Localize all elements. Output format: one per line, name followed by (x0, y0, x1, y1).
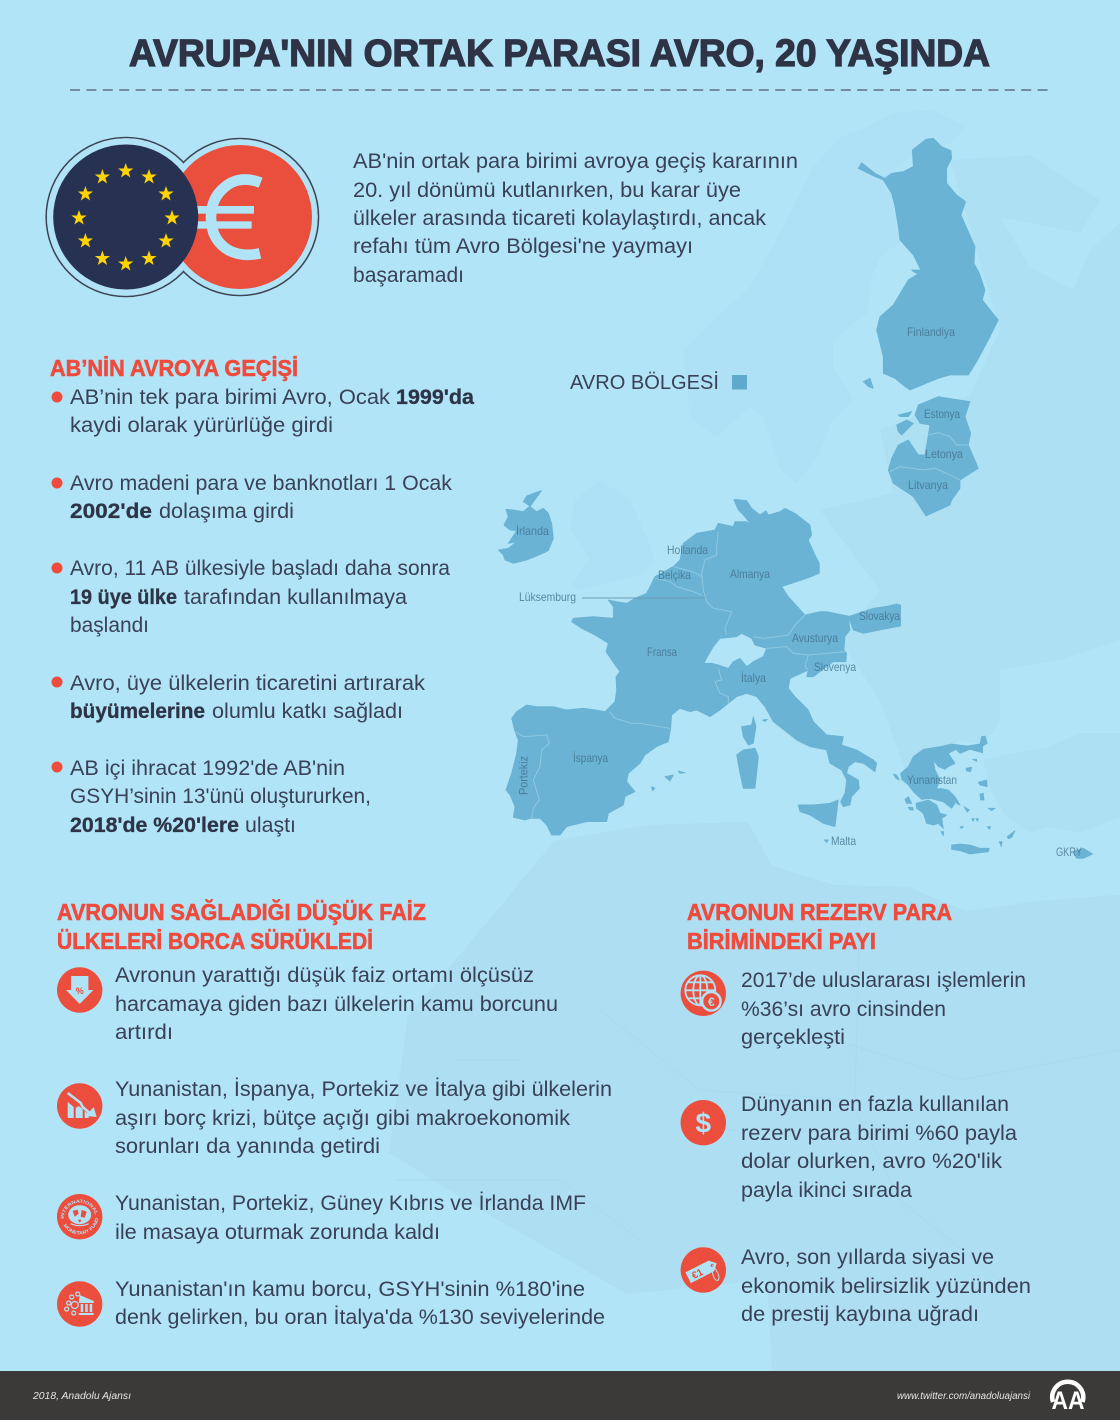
Scandinavia (683, 110, 967, 483)
text: low interest spending: harcamaya giden bazı ülkelerin kamu borcunu (115, 993, 558, 1016)
bullet list: transition to the euro: büyümelerine (70, 700, 205, 723)
icon: euro price tag (681, 1247, 726, 1293)
map: country labels: İspanya (573, 751, 608, 765)
map: country labels: Estonya (924, 407, 960, 421)
text: IMF table: Yunanistan, Portekiz, Güney Kıbrıs ve İrlanda IMF (115, 1192, 586, 1215)
bullet list: transition to the euro: Avro, 11 AB ülkesiyle başladı daha sonra (70, 557, 450, 580)
text: international transactions (741, 969, 1026, 1049)
text: reserve currency (741, 1093, 1017, 1202)
text: prestige loss: de prestij kaybına uğradı (741, 1303, 979, 1326)
map: country labels: Slovenya (814, 660, 856, 674)
intro text: AB'nin ortak para birimi avroya geçiş kararının (353, 150, 798, 173)
icon: IMF seal: MONETARY FUND (64, 1218, 98, 1234)
text: reserve currency: payla ikinci sırada (741, 1179, 912, 1202)
bullet list: transition to the euro: başlandı (70, 614, 149, 637)
footer (0, 1371, 1120, 1420)
map: country labels: Lüksemburg (519, 590, 576, 604)
bullet list: transition to the euro: 2018'de %20'lere (70, 814, 239, 837)
map: country labels: Finlandiya (907, 325, 955, 339)
bullet list: transition to the euro: olumlu katkı sağladı (212, 700, 403, 723)
legend: euro area: AVRO BÖLGESİ (570, 371, 719, 394)
Eastern Europe and Russia (820, 155, 1120, 770)
Africa: faint borders (395, 900, 1120, 1280)
heading: reserve currency share (687, 899, 952, 954)
icon: interest rate down: % (76, 986, 84, 996)
heading: low interest debt (57, 898, 426, 954)
map: country labels: Portekiz (516, 756, 530, 795)
map: country labels: Belçika (658, 568, 691, 582)
icon: globe with euro: € (708, 995, 715, 1009)
UK (570, 480, 655, 590)
Africa (389, 822, 1120, 1371)
text: public debt: denk gelirken, bu oran İtalya'da %130 seviyelerinde (115, 1306, 605, 1329)
bullet list: transition to the euro: 2002'de (70, 500, 152, 523)
icon: IMF seal: INTERNATIONAL (60, 1200, 98, 1218)
Turkey (983, 733, 1120, 833)
logo: Anadolu Agency: AA (1052, 1387, 1084, 1415)
map: country labels: İrlanda (516, 524, 549, 538)
text: IMF table (115, 1192, 586, 1244)
map: country labels: Avusturya (792, 631, 838, 645)
text: low interest spending (115, 964, 558, 1044)
text: low interest spending: artırdı (115, 1021, 173, 1044)
map: country labels: Letonya (925, 447, 963, 461)
text: international transactions: gerçekleşti (741, 1026, 845, 1049)
text: debt crisis: Yunanistan, İspanya, Portekiz ve İtalya gibi ülkelerin (115, 1078, 612, 1101)
map: country labels (516, 325, 1082, 859)
bullet list: transition to the euro: tarafından kullanılmaya (184, 586, 407, 609)
map: country labels: Fransa (647, 645, 677, 659)
intro text: 20. yıl dönümü kutlanırken, bu karar üye (353, 179, 741, 202)
text: international transactions: %36’sı avro cinsinden (741, 998, 946, 1021)
map: Finland and Baltics (858, 138, 998, 516)
text: low interest spending: Avronun yarattığı düşük faiz ortamı ölçüsüz (115, 964, 534, 987)
map: euro area (498, 138, 1093, 859)
title: AVRUPA'NIN ORTAK PARASI AVRO, 20 YAŞINDA (129, 33, 990, 75)
map: country labels: Hollanda (667, 543, 708, 557)
intro text (353, 150, 798, 287)
bullet list: transition to the euro: AB içi ihracat 1992'de AB'nin (70, 757, 345, 780)
icon: interest rate down (57, 967, 102, 1013)
icon: IMF seal (57, 1194, 102, 1240)
text: public debt (115, 1278, 605, 1329)
icon: dollar: $ (696, 1108, 712, 1139)
bullet list: transition to the euro: GSYH’sinin 13'ünü oluştururken, (70, 785, 371, 808)
heading: low interest debt: AVRONUN SAĞLADIĞI DÜŞÜK FAİZ (57, 898, 426, 925)
bullet list: transition to the euro: kaydi olarak yürürlüğe girdi (70, 414, 333, 437)
intro text: başaramadı (353, 264, 464, 287)
map: country labels: Slovakya (859, 609, 900, 623)
map: country labels: Malta (831, 834, 856, 848)
bullet list: transition to the euro: ulaştı (245, 814, 296, 837)
text: IMF table: ile masaya oturmak zorunda kaldı (115, 1221, 440, 1244)
icon: falling chart (57, 1083, 102, 1129)
footer: 2018, Anadolu Ajansı (32, 1391, 131, 1402)
map: western Europe (498, 491, 901, 843)
heading: reserve currency share: BİRİMİNDEKİ PAYI (687, 928, 876, 954)
text: debt crisis: aşırı borç krizi, bütçe açığı gibi makroekonomik (115, 1107, 571, 1130)
text: prestige loss: Avro, son yıllarda siyasi ve (741, 1246, 994, 1269)
map: country labels: İtalya (741, 671, 766, 685)
text: debt crisis (115, 1078, 612, 1158)
text: public debt: Yunanistan'ın kamu borcu, GSYH'sinin %180'ine (115, 1278, 585, 1301)
bullet list: transition to the euro: AB’nin tek para birimi Avro, Ocak (70, 386, 391, 409)
text: reserve currency: Dünyanın en fazla kullanılan (741, 1093, 1009, 1116)
map: country labels: GKRY (1056, 845, 1082, 859)
bullet list: transition to the euro: dolaşıma girdi (159, 500, 294, 523)
text: international transactions: 2017’de uluslararası işlemlerin (741, 969, 1026, 992)
text: prestige loss (741, 1246, 1031, 1326)
icon: EU flag and euro coin (46, 138, 318, 296)
text: reserve currency: dolar olurken, avro %20'lik (741, 1150, 1003, 1173)
map: country labels: Yunanistan (907, 773, 957, 787)
bullet list: transition to the euro (52, 386, 474, 837)
text: debt crisis: sorunları da yanında getirdi (115, 1135, 380, 1158)
heading: reserve currency share: AVRONUN REZERV PARA (687, 899, 952, 925)
map: country labels: Litvanya (908, 478, 948, 492)
text: prestige loss: ekonomik belirsizlik yüzünden (741, 1275, 1031, 1298)
footer: www.twitter.com/anadoluajansi (897, 1391, 1031, 1402)
icon: globe with euro (681, 971, 726, 1016)
intro text: ülkeler arasında ticareti kolaylaştırdı, ancak (353, 207, 767, 230)
icon: dollar (681, 1100, 726, 1145)
icon: bank with coins (57, 1281, 102, 1327)
icon: euro price tag: €1 (690, 1267, 706, 1282)
map: Greece and Cyprus (893, 736, 1093, 858)
heading: low interest debt: ÜLKELERİ BORCA SÜRÜKLEDİ (57, 928, 373, 954)
map: country labels: Almanya (730, 567, 770, 581)
intro text: refahı tüm Avro Bölgesi'ne yaymayı (353, 235, 693, 258)
bullet list: transition to the euro: Avro, üye ülkelerin ticaretini artırarak (70, 672, 426, 695)
bullet list: transition to the euro: 1999'da (396, 386, 474, 409)
bullet list: transition to the euro: Avro madeni para ve banknotları 1 Ocak (70, 472, 452, 495)
text: reserve currency: rezerv para birimi %60 payla (741, 1122, 1017, 1145)
heading: transition to the euro: AB’NİN AVROYA GEÇİŞİ (50, 355, 298, 381)
bullet list: transition to the euro: 19 üye ülke (70, 586, 177, 609)
